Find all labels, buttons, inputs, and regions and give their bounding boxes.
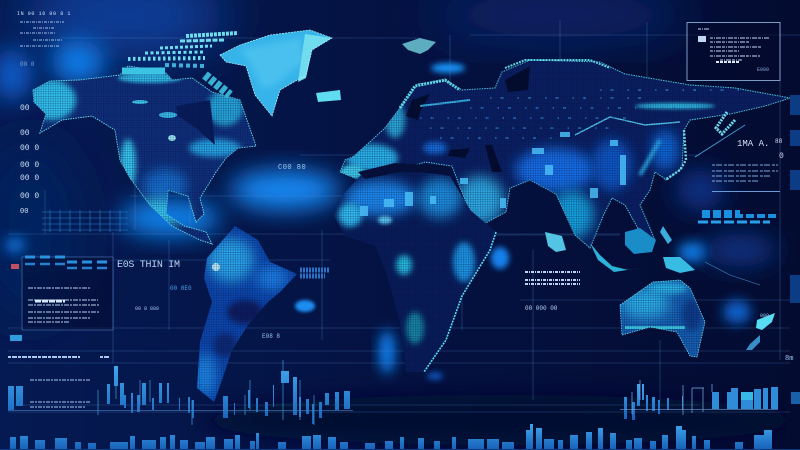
arctic islands xyxy=(122,33,238,95)
data panel: top right xyxy=(687,22,780,80)
centre atlantic label: C00 80 xyxy=(278,164,306,172)
left column labels: 00 0 xyxy=(20,61,35,68)
data panel: top right: E000 xyxy=(757,67,769,73)
side labels: 00 000 00 xyxy=(525,305,558,312)
left column labels: 00 xyxy=(20,208,28,216)
data block: right side readout: 0 xyxy=(779,152,784,161)
data block: right side readout: 88 xyxy=(775,138,783,145)
continent: North America xyxy=(28,66,256,244)
mid-map cyan data spots xyxy=(360,132,626,216)
side labels: E08 8 xyxy=(262,333,280,340)
continent: Australia xyxy=(620,280,705,357)
heading label: lower left: E0S THIN IM xyxy=(117,260,180,271)
side labels xyxy=(135,270,793,363)
Southeast Asia islands xyxy=(545,226,760,285)
left column labels: 00 0 xyxy=(20,161,39,170)
continent: South America xyxy=(194,226,297,402)
side labels: 8m xyxy=(785,355,793,363)
continent: Greenland xyxy=(220,30,332,116)
data block: right side readout xyxy=(698,138,784,222)
continent: Africa xyxy=(334,170,496,372)
left column labels: 00 xyxy=(20,129,30,138)
Iceland xyxy=(316,90,341,102)
data block: right side readout: 1MA A. xyxy=(737,139,769,149)
bar chart: bottom strip xyxy=(0,424,800,450)
left column labels xyxy=(17,11,71,216)
small northern island xyxy=(402,38,436,54)
side labels: 00 8E0 xyxy=(170,285,192,292)
side labels: 000 xyxy=(760,313,769,319)
left column labels: IN 00 10 00 8 1 xyxy=(17,11,71,17)
data panel: lower left xyxy=(8,257,113,357)
left column labels: 00 0 xyxy=(20,174,39,183)
Kamchatka and Japan arc xyxy=(665,112,745,180)
bar chart: lower right xyxy=(620,380,778,420)
left column labels: 00 xyxy=(20,104,30,113)
left column labels: 00 0 xyxy=(20,192,39,201)
side labels: 00 8 880 xyxy=(135,306,159,312)
New Zealand xyxy=(746,313,775,350)
chart panel: left grid xyxy=(42,210,128,232)
left column labels: 00 0 xyxy=(20,144,39,153)
right edge tiles xyxy=(790,95,800,404)
bar chart: lower left and centre xyxy=(8,360,353,425)
continent: Eurasia xyxy=(340,60,790,248)
glow lights behind the map xyxy=(0,40,776,380)
Mediterranean sea xyxy=(358,163,452,179)
